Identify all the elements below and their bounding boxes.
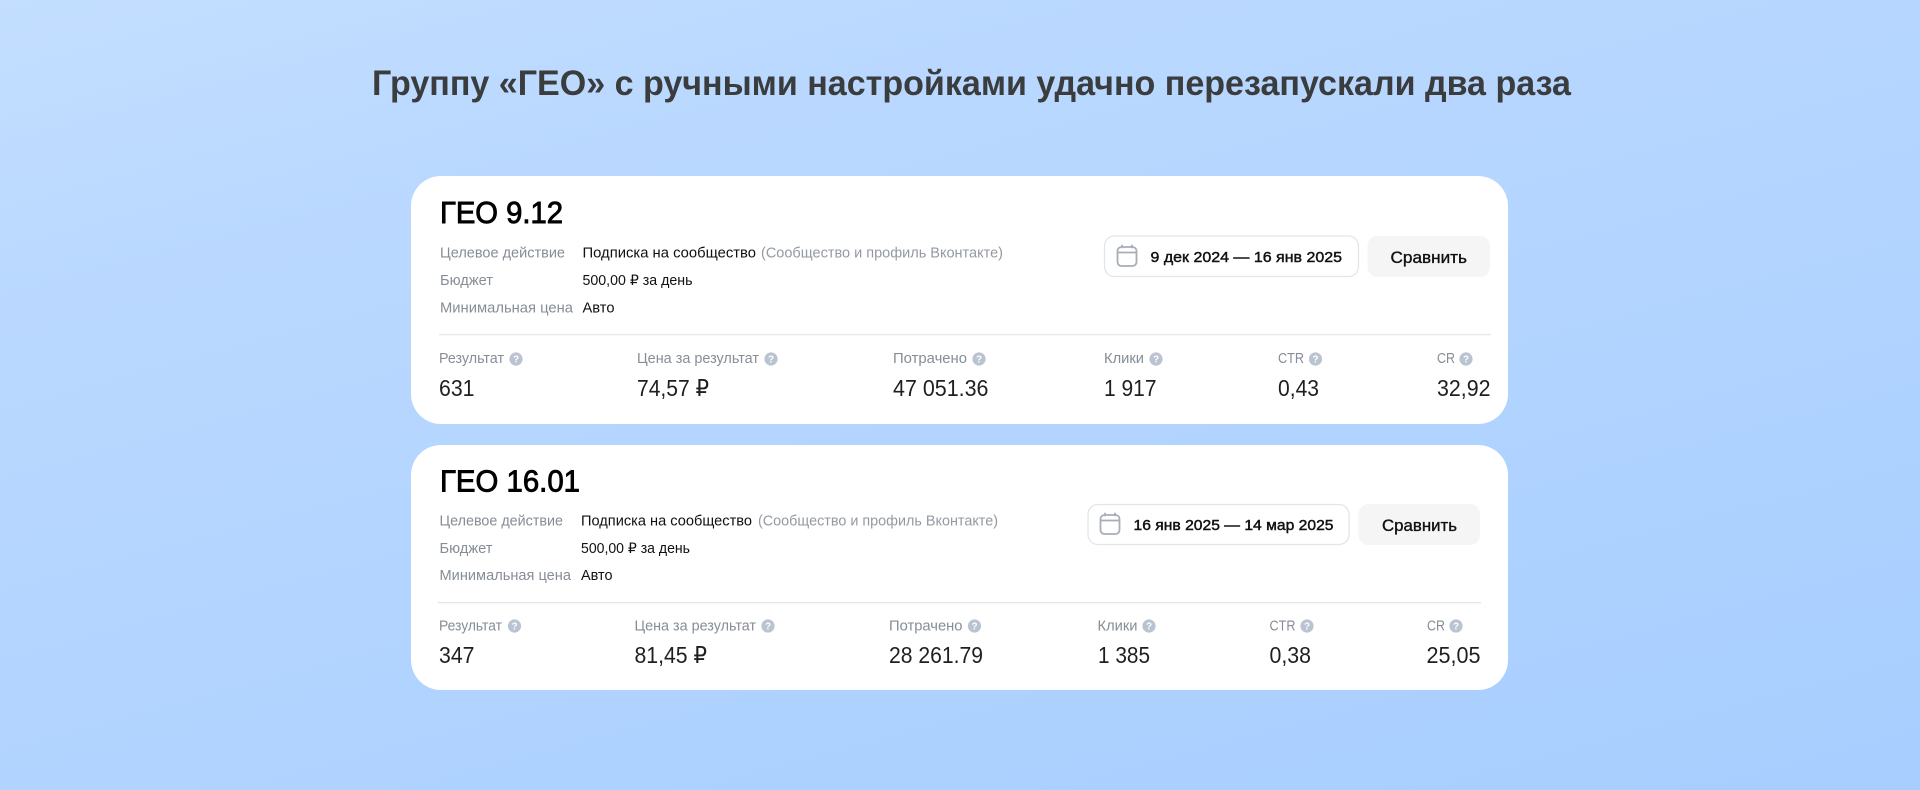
date range picker xyxy=(1088,504,1349,544)
panel: ГЕО 9.12 xyxy=(411,176,1508,424)
icon: calendar xyxy=(1118,245,1136,266)
campaign details: Авто xyxy=(582,300,614,316)
metric: Клики xyxy=(1104,351,1163,401)
campaign details xyxy=(440,246,1003,316)
campaign details: 500,00 ₽ за день xyxy=(581,541,690,557)
metric: CR: 32,92 xyxy=(1437,375,1490,401)
metric: CTR: ? xyxy=(1304,622,1310,632)
campaign details: Целевое действие xyxy=(440,514,563,530)
compare button xyxy=(1358,504,1480,545)
metric: Цена за результат: ? xyxy=(768,354,774,366)
campaign details: Авто xyxy=(581,568,612,584)
metric: Клики: ? xyxy=(1146,622,1152,632)
campaign details: (Сообщество и профиль Вконтакте) xyxy=(761,246,1003,262)
metric: Потрачено: ? xyxy=(971,622,978,632)
compare button: Сравнить xyxy=(1382,517,1457,535)
metric: CTR xyxy=(1278,351,1322,401)
metric: CR: CR xyxy=(1437,351,1455,367)
metric: Результат: ? xyxy=(511,622,518,632)
campaign details: Подписка на сообщество xyxy=(581,514,752,530)
date range picker xyxy=(1104,236,1358,276)
campaign details: Подписка на сообщество xyxy=(582,246,756,262)
panel heading: ГЕО 16.01 xyxy=(440,464,580,498)
metric: Клики: ? xyxy=(1153,354,1159,366)
metric: Результат xyxy=(439,618,521,668)
metric: Результат: 347 xyxy=(439,642,474,668)
campaign details: Бюджет xyxy=(440,273,493,289)
metric: CR xyxy=(1437,351,1490,401)
metric: Клики: 1 917 xyxy=(1104,375,1156,401)
metric: CTR xyxy=(1270,618,1314,668)
title: Группу «ГЕО» с ручными настройками удачно перезапускали два раза xyxy=(372,64,1572,103)
metric: Цена за результат: Цена за результат xyxy=(634,618,756,634)
metric: CTR: ? xyxy=(1312,354,1319,366)
metric: Цена за результат xyxy=(637,351,778,401)
metric: Потрачено: ? xyxy=(976,354,982,366)
metric: CR: 25,05 xyxy=(1426,642,1480,668)
metric: Цена за результат: 74,57 ₽ xyxy=(637,375,709,401)
metric: CTR: CTR xyxy=(1278,351,1304,367)
metric: CR: ? xyxy=(1453,622,1459,632)
campaign details: Минимальная цена xyxy=(440,568,572,584)
metric: Потрачено: Потрачено xyxy=(893,351,967,367)
campaign details xyxy=(440,514,998,584)
metric: Результат: Результат xyxy=(439,618,502,634)
metric: Цена за результат: Цена за результат xyxy=(637,351,759,367)
compare button: Сравнить xyxy=(1390,249,1467,267)
panel: ГЕО 16.01 xyxy=(411,445,1508,690)
panel heading: ГЕО 9.12 xyxy=(440,195,563,230)
campaign details: Бюджет xyxy=(440,541,493,557)
metric: Потрачено: 47 051.36 xyxy=(893,375,988,401)
metric: Цена за результат xyxy=(634,618,775,668)
campaign details: (Сообщество и профиль Вконтакте) xyxy=(758,514,998,530)
campaign details: Минимальная цена xyxy=(440,300,574,316)
metric: CTR: 0,43 xyxy=(1278,375,1319,401)
metric: Клики xyxy=(1098,618,1156,668)
metric: Результат xyxy=(439,351,523,401)
metric: CTR: CTR xyxy=(1270,618,1296,634)
campaign details: 500,00 ₽ за день xyxy=(582,273,692,289)
metric: Потрачено xyxy=(893,351,988,401)
metric: Результат: ? xyxy=(513,354,519,366)
date range picker: 16 янв 2025 — 14 мар 2025 xyxy=(1134,517,1334,534)
metric: CR: CR xyxy=(1427,618,1445,634)
metric: Потрачено: Потрачено xyxy=(889,618,962,634)
metric: Клики: 1 385 xyxy=(1098,642,1150,668)
metric: Результат: Результат xyxy=(439,351,504,367)
metric: CR xyxy=(1426,618,1480,668)
metric: Клики: Клики xyxy=(1104,351,1144,367)
metric: Потрачено xyxy=(889,618,983,668)
metric: Результат: 631 xyxy=(439,375,474,401)
compare button xyxy=(1368,236,1490,277)
date range picker: 9 дек 2024 — 16 янв 2025 xyxy=(1150,249,1342,266)
metric: Цена за результат: ? xyxy=(765,622,771,632)
metric: Цена за результат: 81,45 ₽ xyxy=(634,642,707,668)
icon: calendar xyxy=(1100,513,1120,534)
metric: Клики: Клики xyxy=(1098,618,1138,634)
metric: CR: ? xyxy=(1463,354,1469,366)
metric: CTR: 0,38 xyxy=(1270,642,1311,668)
campaign details: Целевое действие xyxy=(440,246,565,262)
metric: Потрачено: 28 261.79 xyxy=(889,642,983,668)
